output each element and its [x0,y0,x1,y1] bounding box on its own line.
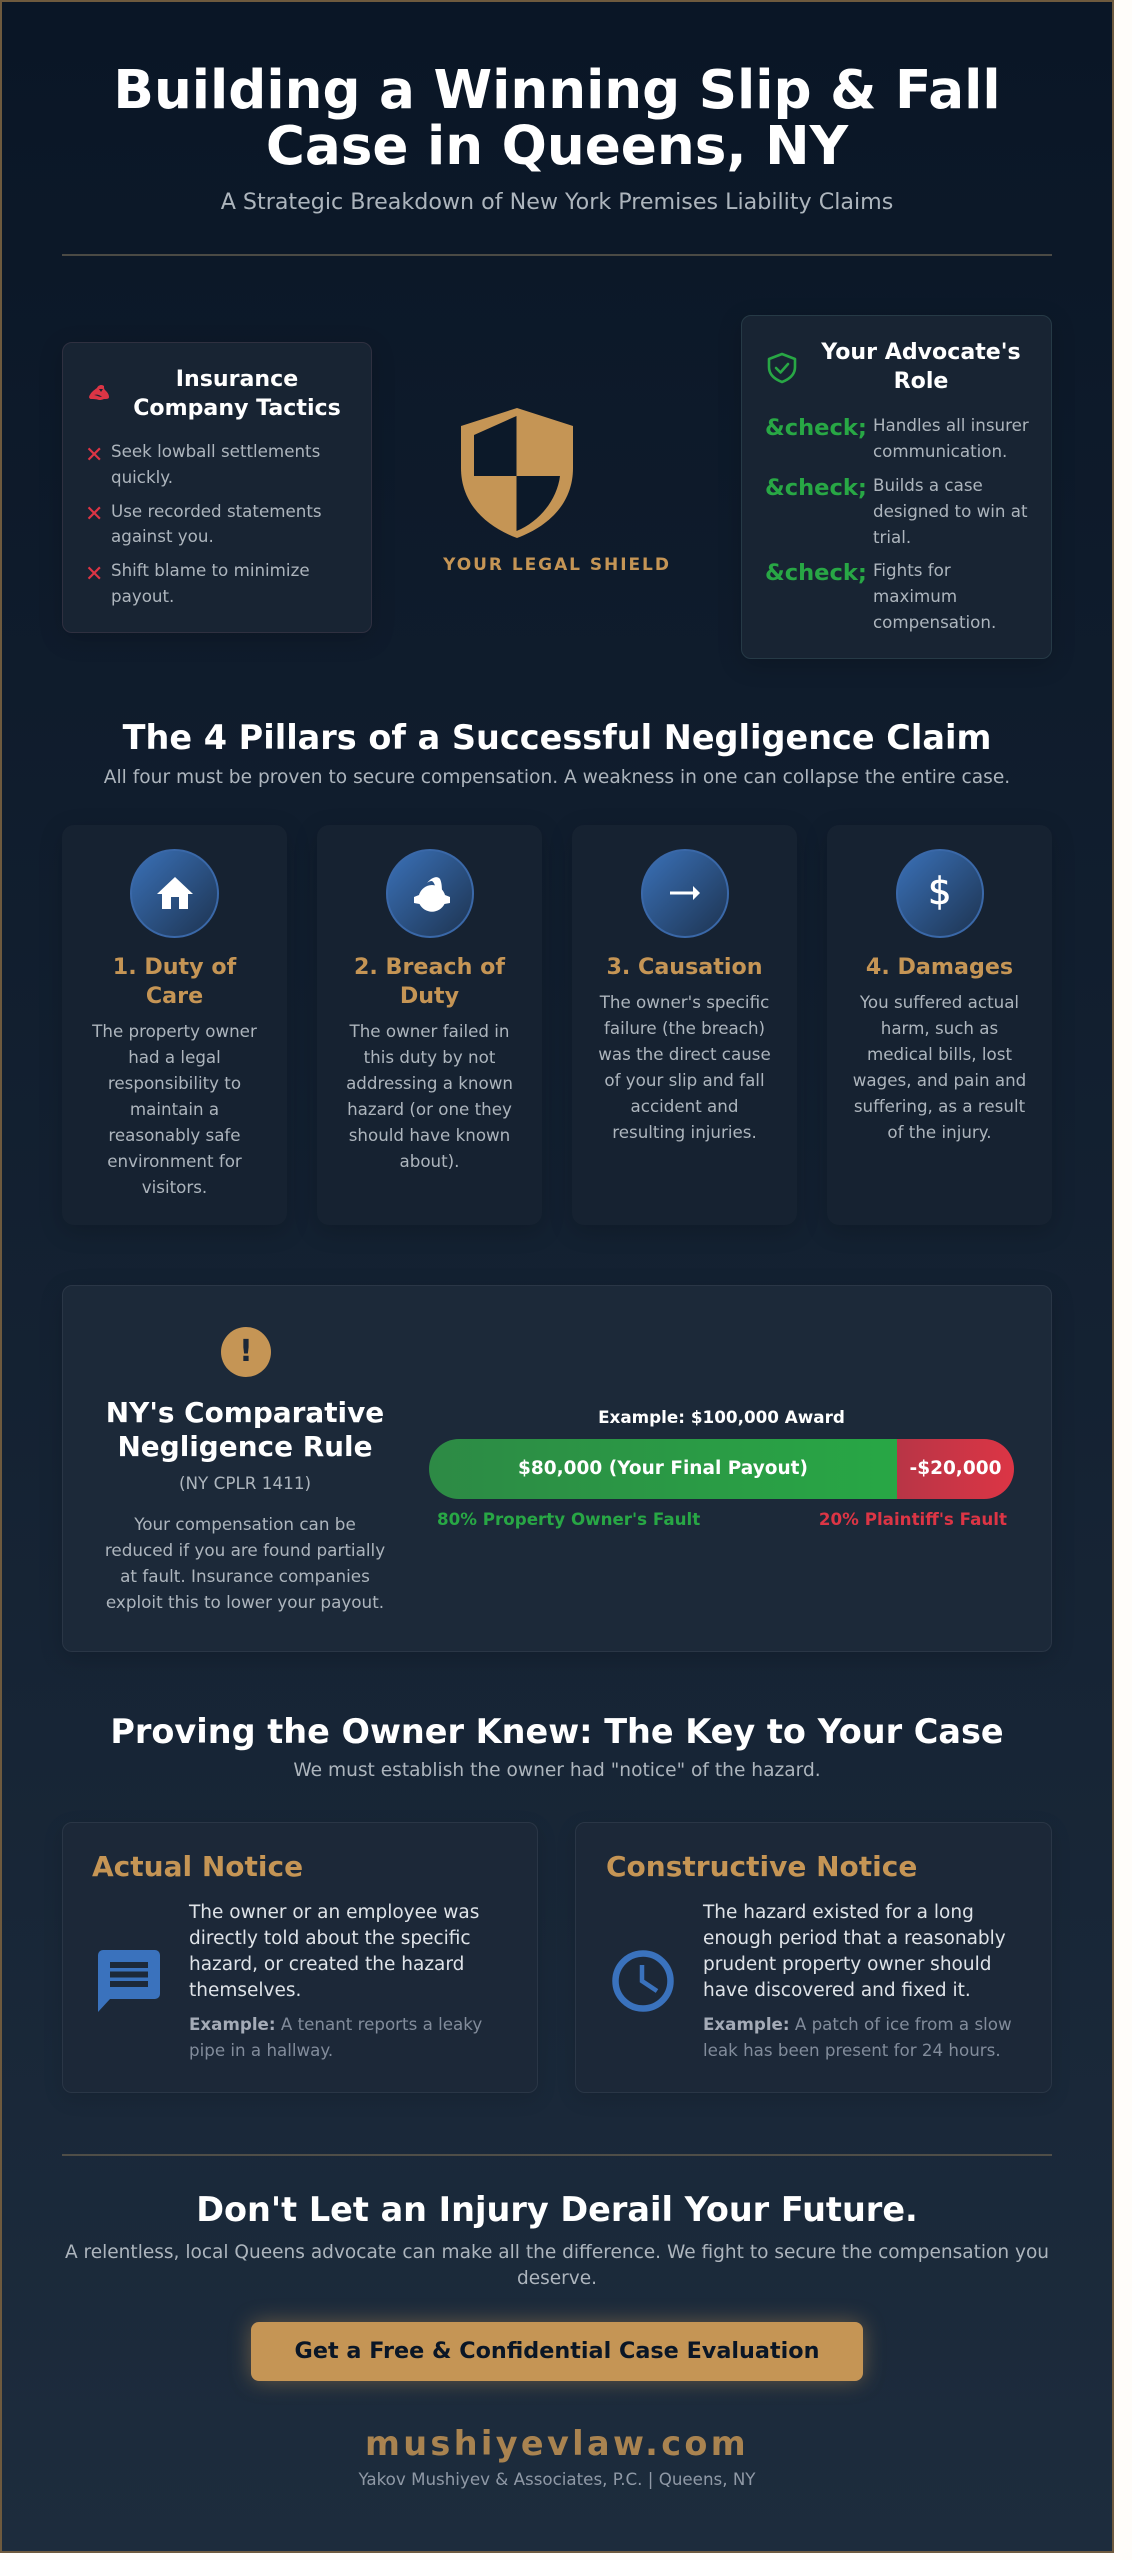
icon: legal shield [461,408,573,538]
notice example: leak has been present for 24 hours. [703,2040,1001,2060]
pillar title: 3. Causation [606,954,763,980]
panel: your advocate's role: designed to win at [873,501,1028,521]
pillar text: medical bills, lost [867,1044,1012,1064]
button: case evaluation [251,2322,863,2381]
pillar text: wages, and pain and [853,1070,1026,1090]
panel: insurance company tactics [62,342,372,633]
pillar text: visitors. [142,1177,207,1197]
pillar text: environment for [107,1151,242,1171]
explanation: Your compensation can be [134,1514,356,1534]
heading: insurance company tactics: Company Tactics [133,395,341,421]
pillar text: reasonably safe [108,1125,241,1145]
call to action text [65,2242,1049,2288]
panel: pillar 1 duty of care [62,825,287,1225]
icon: house [130,849,218,938]
pillar text: of your slip and fall [604,1070,765,1090]
list item 2 [765,474,1028,547]
pillar text [346,1021,513,1171]
panel: insurance company tactics: Shift blame to minimize [111,560,310,580]
panel: your advocate's role: &check; [765,414,867,440]
icon: clock [612,1950,674,2012]
bar: payout [429,1439,897,1499]
pillar text: accident and [631,1096,738,1116]
title: Building a Winning Slip & Fall [113,58,1001,120]
pillar text: resulting injuries. [612,1122,757,1142]
icon: dollar [896,849,984,938]
panel: constructive notice [575,1822,1052,2093]
notice description [702,1902,1006,2001]
panel: comparative negligence [62,1285,1052,1652]
title: Case in Queens, NY [266,114,848,176]
label: plaintiff fault: 20% Plaintiff's Fault [819,1508,1007,1528]
list item 2 [85,500,322,546]
panel: insurance company tactics: ✕ [85,442,103,468]
pillar text: harm, such as [881,1018,998,1038]
pillar text: suffering, as a result [854,1096,1025,1116]
notice subheading: We must establish the owner had "notice" of the hazard. [293,1760,821,1781]
notice description: directly told about the specific [189,1928,471,1949]
button: case evaluation: Get a Free & Confidential Case Evaluation [295,2338,819,2364]
pillar text: failure (the breach) [604,1018,765,1038]
notice description: The owner or an employee was [189,1902,479,1923]
panel: your advocate's role: Fights for [873,560,951,580]
panel: insurance company tactics: against you. [111,526,214,546]
icon: arrow [640,849,729,938]
pillar text: about). [400,1151,459,1171]
pillar text [853,992,1026,1142]
notice example [189,2014,482,2060]
panel: your advocate's role: Handles all insurer [873,415,1029,435]
notice description: enough period that a reasonably [703,1928,1006,1949]
notice description [188,1902,479,2001]
notice description: prudent property owner should [703,1954,991,1975]
heading: comparative negligence: Negligence Rule [117,1430,373,1462]
pillar text: maintain a [130,1099,219,1119]
panel: actual notice [62,1822,538,2093]
panel: your advocate's role: &check; [765,474,867,500]
pillar title [354,954,506,1009]
pillar text: addressing a known [346,1073,513,1093]
icon: dollar: $ [928,870,952,913]
notice description: hazard, or created the hazard [189,1954,464,1975]
notice description: themselves. [189,1980,301,2001]
pillar text [92,1021,257,1197]
explanation [105,1514,385,1612]
panel: pillar 2 breach of duty [317,825,542,1225]
bar chart: payout split [429,1407,1014,1528]
list item 1 [765,414,1029,461]
notice title: Constructive Notice [606,1850,917,1883]
pillar title: 1. Duty of [113,954,236,980]
notice example: Example: A tenant reports a leaky [189,2014,482,2034]
heading: your advocate's role: Role [894,368,948,394]
pillars subheading: All four must be proven to secure compensation. A weakness in one can collapse the entire case. [104,766,1010,788]
heading: insurance company tactics [133,366,341,421]
heading: your advocate's role [821,339,1021,394]
notice example: pipe in a hallway. [189,2040,333,2060]
heading: comparative negligence [106,1396,384,1462]
pillar title: Duty [400,983,459,1009]
icon: warning [221,1327,271,1377]
pillar text: was the direct cause [598,1044,771,1064]
panel: your advocate's role: &check; [765,560,867,586]
subtitle: A Strategic Breakdown of New York Premises Liability Claims [221,189,893,215]
firm name: Yakov Mushiyev & Associates, P.C. | Queens, NY [358,2469,756,2489]
call to action text: A relentless, local Queens advocate can make all the difference. We fight to secure the compensation you [65,2242,1049,2262]
icon: broken lock [386,849,474,938]
notice example: Example: A patch of ice from a slow [703,2014,1012,2034]
notice example [703,2014,1012,2060]
pillar text: of the injury. [887,1122,992,1142]
panel: insurance company tactics: Seek lowball settlements [111,441,320,461]
panel: your advocate's role: communication. [873,441,1007,461]
list item 3 [85,560,310,606]
notice description: have discovered and fixed it. [703,1980,971,2001]
panel: your advocate's role: Builds a case [873,475,983,495]
heading: comparative negligence: NY's Comparative [106,1396,384,1429]
panel: your advocate's role: compensation. [873,612,996,632]
explanation: reduced if you are found partially [105,1540,385,1560]
pillar title: Care [146,983,203,1009]
list item 3 [765,560,996,632]
panel: your advocate's role: trial. [873,527,911,547]
heading: insurance company tactics: Insurance [176,366,298,392]
panel: insurance company tactics: ✕ [85,562,103,586]
label: owner fault: 80% Property Owner's Fault [437,1508,700,1528]
pillar text: this duty by not [364,1047,495,1067]
bar: reduction [897,1439,1014,1499]
notice description: The hazard existed for a long [703,1902,974,1923]
bar: reduction: -$20,000 [910,1458,1001,1479]
call to action text: deserve. [517,2268,597,2288]
icon: chat bubble [98,1950,160,2012]
panel: pillar 4 damages [827,825,1052,1225]
heading: four pillars: The 4 Pillars of a Successful Negligence Claim [123,718,991,757]
pillar text: had a legal [128,1047,221,1067]
panel: insurance company tactics: ✕ [85,502,103,527]
pillar text: responsibility to [108,1073,241,1093]
list item 1 [85,441,320,487]
icon: insurer hand [89,385,109,400]
panel: insurance company tactics: Use recorded statements [111,500,322,520]
notice title: Actual Notice [92,1850,303,1883]
pillar text: The owner failed in [350,1021,509,1041]
pillar text: should have known [349,1125,510,1145]
panel: pillar 3 causation [572,825,797,1225]
shield label: YOUR LEGAL SHIELD [443,555,671,575]
explanation: at fault. Insurance companies [120,1566,370,1586]
heading: proving notice: Proving the Owner Knew: The Key to Your Case [110,1712,1004,1751]
pillar title [113,954,236,1009]
pillar text: hazard (or one they [347,1099,512,1119]
title [113,58,1001,176]
heading: call to action: Don't Let an Injury Derail Your Future. [196,2190,918,2229]
icon: warning: ! [239,1334,253,1369]
website: mushiyevlaw.com [365,2424,749,2463]
pillar text [598,992,771,1142]
panel: your advocate's role: maximum [873,586,957,606]
heading: your advocate's role: Your Advocate's [821,339,1021,365]
bar: payout: $80,000 (Your Final Payout) [518,1458,808,1479]
pillar title: 4. Damages [866,954,1013,980]
panel: insurance company tactics: payout. [111,586,174,606]
pillar text: The property owner [92,1021,257,1041]
pillar text: The owner's specific [600,992,769,1012]
icon: shield check [768,352,796,384]
panel: insurance company tactics: quickly. [111,467,173,487]
panel: your advocate's role [741,315,1052,659]
pillar text: You suffered actual [860,992,1019,1012]
explanation: exploit this to lower your payout. [106,1592,384,1612]
chart title: Example: $100,000 Award [598,1407,845,1427]
pillar title: 2. Breach of [354,954,505,980]
statute reference: (NY CPLR 1411) [179,1473,311,1493]
